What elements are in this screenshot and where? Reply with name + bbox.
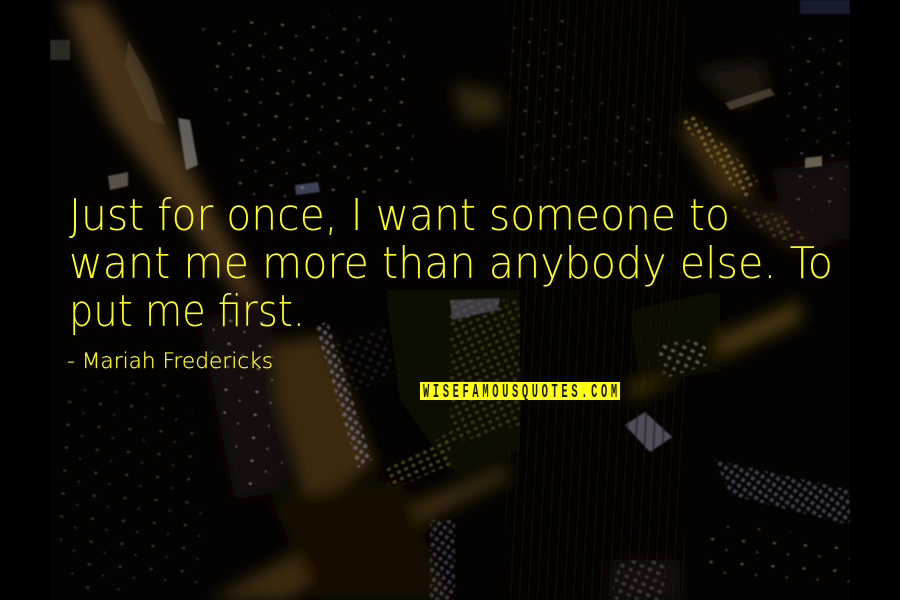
quote text bbox=[69, 190, 833, 337]
attribution: - Mariah Fredericks bbox=[67, 349, 273, 373]
quote text: Just for once, I want someone to bbox=[69, 190, 730, 241]
watermark badge: WISEFAMOUSQUOTES.COM bbox=[423, 381, 617, 403]
side bars bbox=[0, 0, 50, 600]
quote text: want me more than anybody else. To bbox=[69, 238, 833, 289]
quote text: put me first. bbox=[69, 286, 305, 337]
